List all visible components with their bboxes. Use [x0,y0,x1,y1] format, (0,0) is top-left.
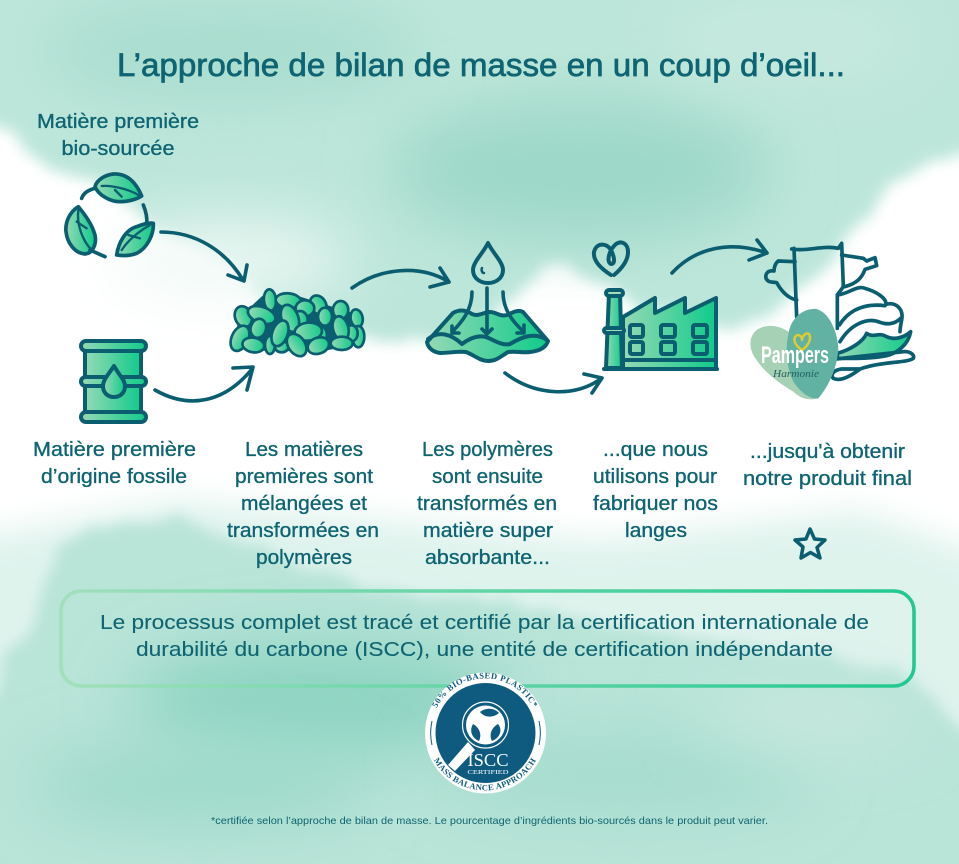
label: step polymers: polymères [256,546,352,569]
label: step absorbent: sont ensuite [432,465,543,488]
certification callout box [61,591,914,686]
logo: Pampers Harmonie: Pampers [761,342,829,369]
label: step polymers: transformées en [227,519,379,542]
label: step absorbent [417,438,557,569]
label: step polymers [227,438,379,569]
icon: pile of pellets [227,289,364,360]
icon: oil barrel [81,341,146,422]
label: fossil raw material: Matière première [33,438,196,461]
label: bio-sourced raw material: Matière première [37,110,199,133]
badge wordmark: CERTIFIED [468,769,509,776]
label: final product [743,440,912,490]
callout text [100,611,869,661]
arrow: pellets to polymers [352,268,449,288]
logo: Pampers Harmonie [750,309,838,399]
label: step polymers: mélangées et [241,492,367,515]
label: step polymers: Les matières [245,438,363,461]
ISCC badge [425,672,546,794]
badge ring text: 50% BIO-BASED PLASTIC* [432,672,538,708]
icon: heart [594,242,628,275]
arrow: factory to diaper [672,240,767,273]
footnote: *certifiée selon l’approche de bilan de masse. Le pourcentage d’ingrédients bio-sourcés dans le produit peut varier. [211,815,768,827]
icon: diaper [766,243,914,379]
label: step manufacture: ...que nous [603,438,708,461]
badge wordmark: ISCC [468,750,508,770]
logo: Pampers Harmonie: Harmonie [772,368,819,380]
label: fossil raw material: d’origine fossile [41,465,187,488]
label: step absorbent: transformés en [417,492,557,515]
icon: droplet and absorbent material [427,243,548,361]
icon: recycling leaves [66,174,153,257]
label: step absorbent: matière super [423,519,553,542]
label: step polymers: premières sont [235,465,373,488]
badge ring text [432,672,538,790]
callout text: durabilité du carbone (ISCC), une entité de certification indépendante [136,638,833,661]
icon: star [795,529,825,558]
badge ring text: MASS BALANCE APPROACH [434,757,536,790]
icon: factory [604,290,717,369]
label: bio-sourced raw material [37,110,199,160]
label: final product: notre produit final [743,467,912,490]
badge magnifier [448,702,508,771]
arrow: polymers to factory [505,373,602,393]
callout text: Le processus complet est tracé et certifié par la certification internationale de [100,611,869,634]
label: bio-sourced raw material: bio-sourcée [62,137,174,160]
arrow: bio to pellets [161,232,247,281]
label: final product: ...jusqu'à obtenir [750,440,905,463]
arrow: fossil to pellets [155,367,253,401]
title: L’approche de bilan de masse en un coup d’oeil... [117,47,845,83]
label: fossil raw material [33,438,196,488]
label: step absorbent: Les polymères [422,438,553,461]
label: step manufacture: fabriquer nos [593,492,718,515]
label: step absorbent: absorbante... [425,546,550,569]
label: step manufacture [593,438,718,542]
label: step manufacture: utilisons pour [593,465,717,488]
label: step manufacture: langes [625,519,687,542]
